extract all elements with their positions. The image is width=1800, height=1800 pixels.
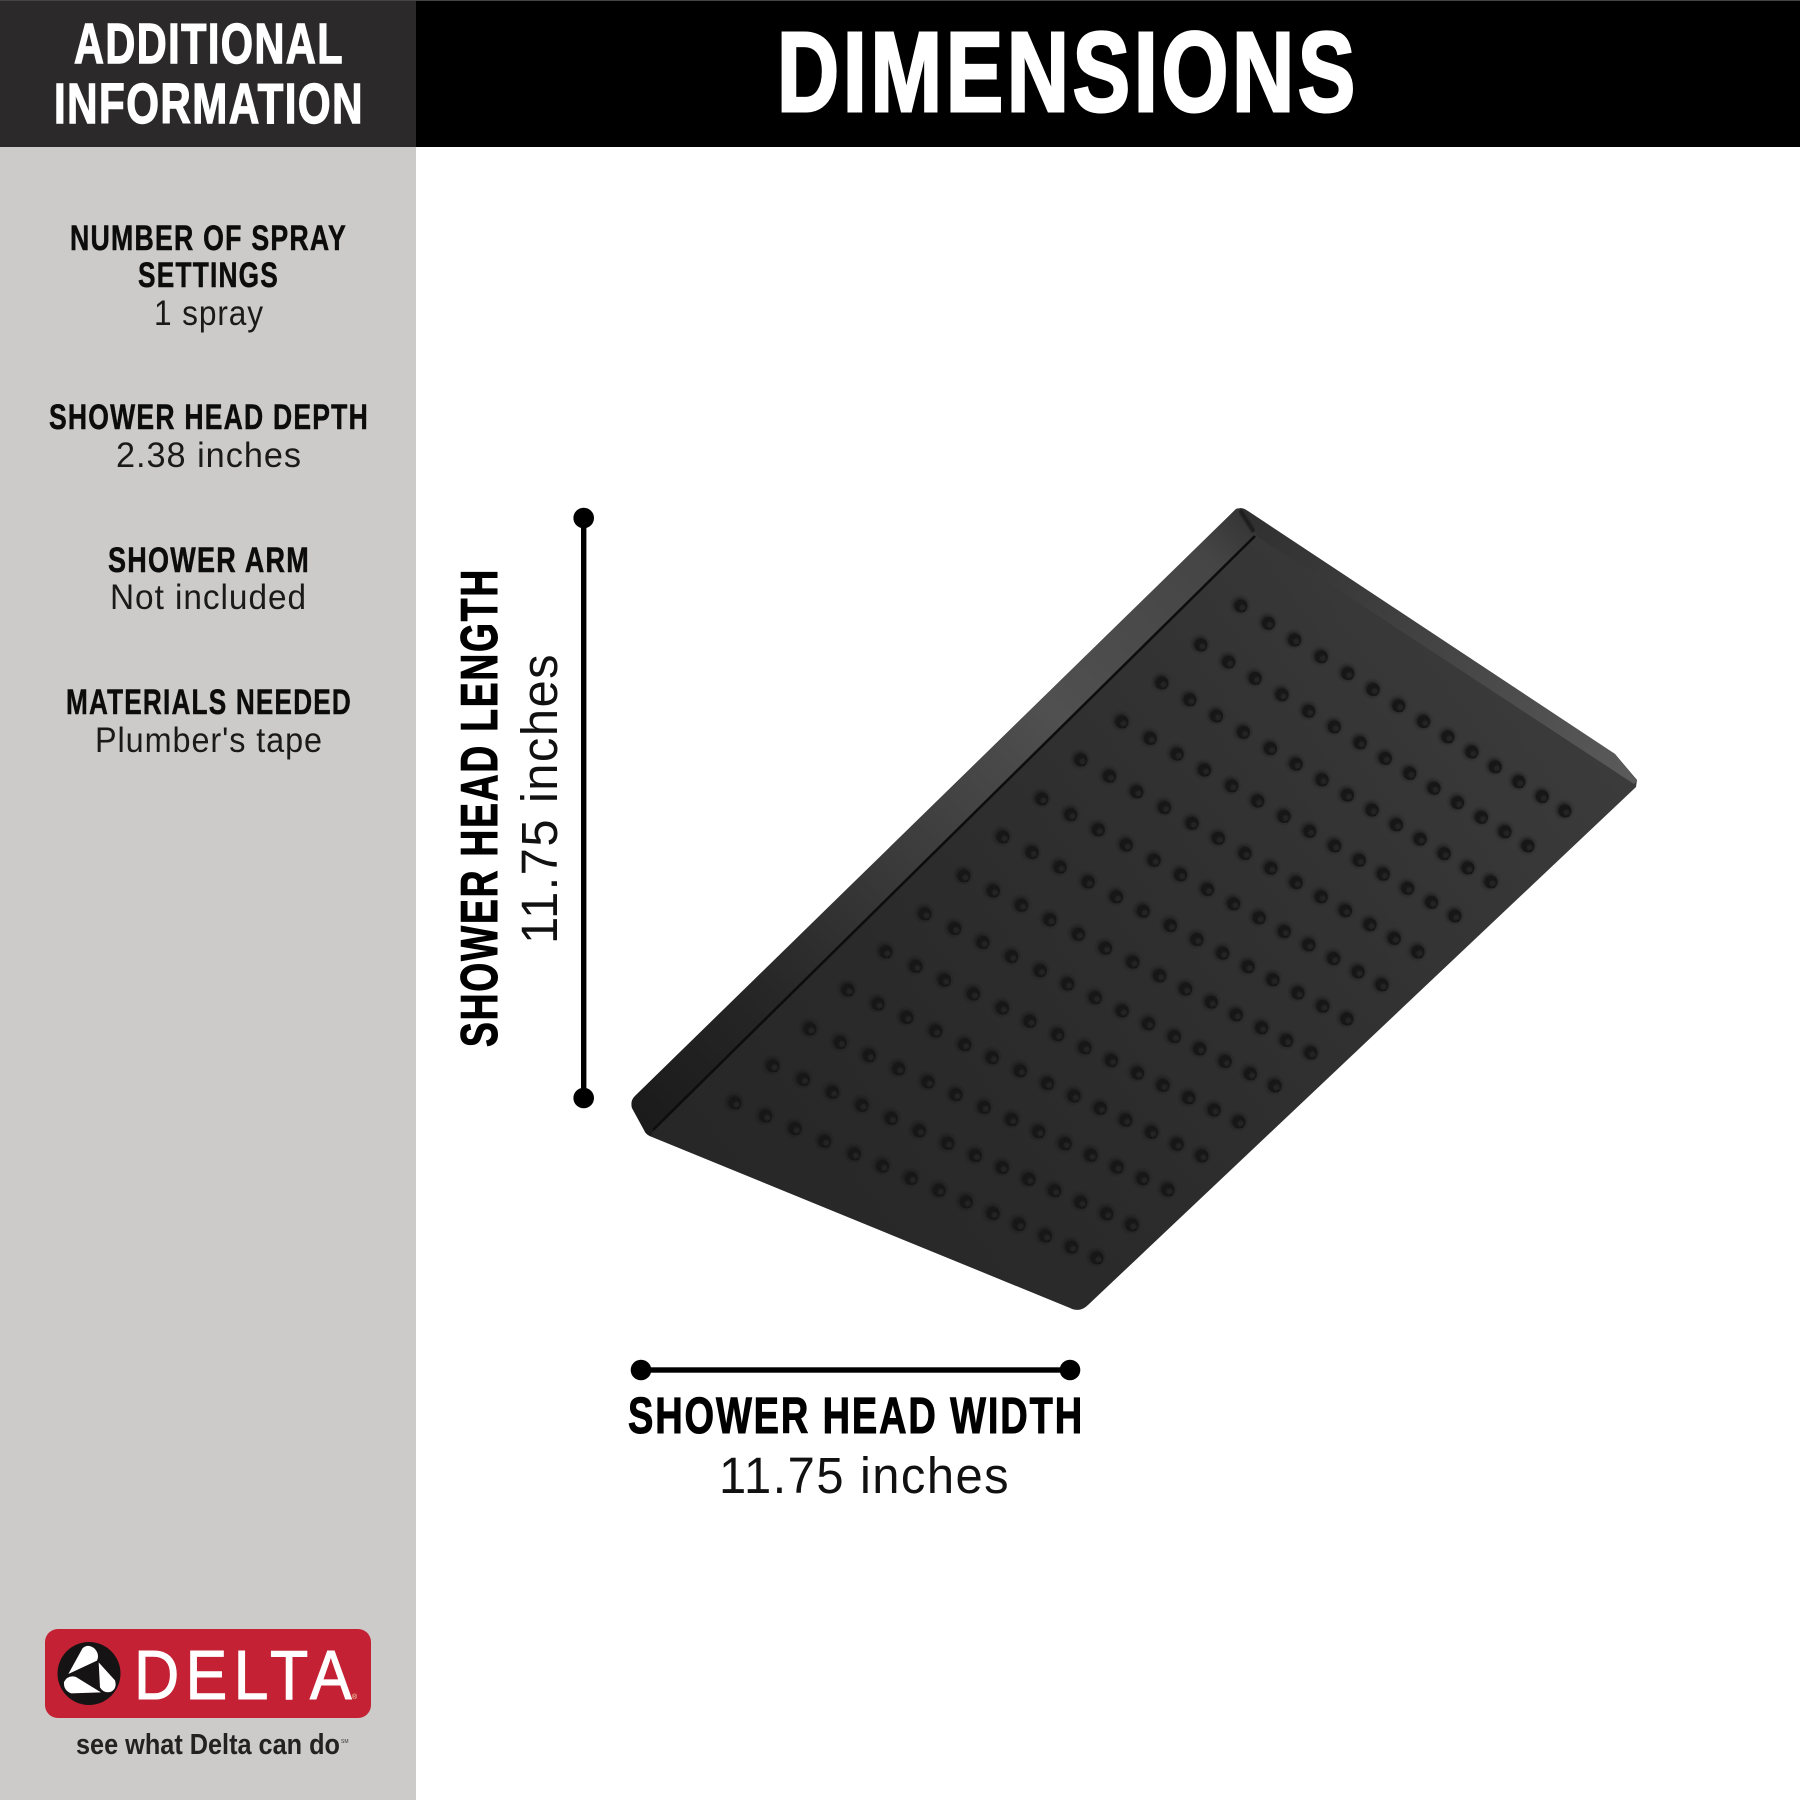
logo: delta: DELTA — [134, 1636, 358, 1714]
spec: shower arm — [108, 541, 310, 617]
header: dimensions: DIMENSIONS — [777, 9, 1359, 135]
header: additional information: INFORMATION — [54, 72, 364, 136]
dimension: shower head length: 11.75 inches — [511, 653, 568, 944]
arrow: length bar — [573, 508, 594, 1108]
dimension: shower head width: 11.75 inches — [719, 1447, 1010, 1504]
logo: delta: SM — [341, 1739, 348, 1745]
spec: number of spray settings: 1 spray — [154, 294, 264, 333]
dimension: shower head length: SHOWER HEAD LENGTH — [451, 568, 509, 1047]
shower head face — [631, 508, 1637, 1310]
spec: materials needed: Plumber's tape — [95, 721, 323, 760]
spec: shower arm: SHOWER ARM — [108, 541, 310, 580]
header edge line — [0, 0, 1800, 1]
spec: shower arm: Not included — [110, 578, 307, 617]
spec: materials needed — [66, 683, 352, 760]
tagline: see what Delta can do — [76, 1729, 340, 1761]
left edge band — [631, 508, 1257, 1136]
seam line — [653, 536, 1255, 1130]
dimension: shower head width — [628, 1360, 1084, 1504]
spec: number of spray settings: NUMBER OF SPRAY — [70, 219, 347, 258]
spec: materials needed: MATERIALS NEEDED — [66, 683, 352, 722]
dimension: shower head length — [451, 508, 594, 1108]
corner crease — [1240, 510, 1254, 532]
spec: shower head depth — [49, 398, 369, 475]
header: additional information: ADDITIONAL — [74, 12, 344, 76]
shower head illustration — [631, 508, 1637, 1310]
spray nozzles — [734, 605, 1568, 1263]
panel: additional information sidebar — [0, 0, 416, 1800]
arrow: width bar — [631, 1360, 1080, 1380]
spec: number of spray settings: SETTINGS — [138, 256, 279, 295]
header: dimensions — [416, 0, 1800, 147]
header: additional information — [0, 0, 416, 147]
icon: delta emblem — [58, 1642, 120, 1705]
spec: shower head depth: 2.38 inches — [116, 436, 302, 475]
spec: shower head depth: SHOWER HEAD DEPTH — [49, 398, 369, 437]
logo: delta: ® — [352, 1693, 358, 1701]
logo: delta — [45, 1629, 371, 1761]
spec: number of spray settings — [70, 219, 347, 333]
top edge band — [1240, 508, 1637, 784]
dimension: shower head width: SHOWER HEAD WIDTH — [628, 1387, 1084, 1444]
